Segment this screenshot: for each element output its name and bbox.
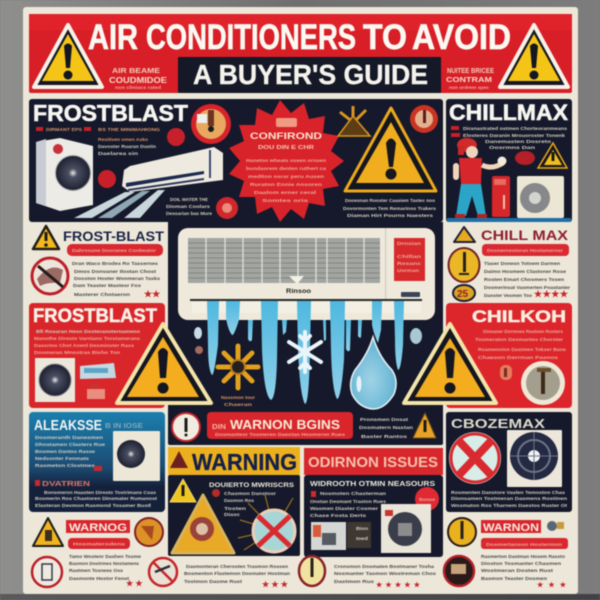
small warning triangle: [538, 143, 567, 168]
central AC unit: Drnsian: [397, 241, 421, 246]
description: Elosteres Daranin Mrouoroster Tonenk: [463, 133, 566, 138]
unit card: [35, 358, 75, 402]
description: Rasmeton Clostmes: [35, 463, 96, 468]
text rows: Chasmon Danstosr: [224, 491, 276, 496]
side note: Dosmatern Nastan: [359, 425, 413, 430]
panel: Warning: [168, 447, 300, 556]
description: [475, 329, 566, 360]
text rows: [212, 489, 276, 517]
starburst callout: DOU DIN E CHR: [258, 145, 314, 151]
description: [451, 490, 568, 508]
description: Bfi Rosaran Hesn Dosteranoternameno: [36, 329, 140, 334]
panel: Odirnon Issues: [304, 448, 443, 557]
panel: Cbozemax: [446, 412, 572, 512]
yellow heading band: WARNING: [192, 449, 297, 475]
red label: DIN: [212, 424, 226, 431]
body text: Daimo Hosmem Clastoner Rose: [484, 269, 567, 274]
floor strip: [447, 218, 571, 222]
section: Frost-Blast white: [32, 226, 165, 299]
right note: Nosmanter Tasmon Wostreman Chos: [334, 571, 437, 576]
icon: large left triangle: [117, 324, 211, 403]
description: [451, 126, 568, 150]
central AC unit: Chillan: [397, 254, 421, 259]
body text: Danster Vesmen Too: [484, 293, 532, 298]
text block: Bion: [356, 526, 368, 531]
stars: ★ ★: [126, 579, 143, 588]
spec text: Resitiven omen Asko: [98, 137, 148, 142]
subheading: WIDROOTH OTMIN NEASOURS: [310, 481, 435, 488]
red pill: Hosmaterodens: [73, 542, 126, 546]
heading: CBOZEMAX: [451, 416, 545, 431]
icon: right warning triangle: [500, 25, 568, 87]
indoor unit: [122, 147, 223, 192]
description: Oosrmns Dan: [489, 145, 535, 150]
description: Elasteran Devmon Rasmond Tosamer Bustl: [35, 503, 151, 508]
red extinguisher box: [492, 176, 510, 217]
icon: small valve: [500, 365, 512, 380]
side note: Pronsmen Dosat: [360, 417, 409, 422]
red pill: Dosmertanson Hostermon: [486, 542, 562, 547]
stars: ★★★★: [534, 289, 569, 299]
text rows: Dasmon Ros: [224, 498, 254, 503]
section: Chill Max white: [448, 227, 570, 301]
body text: Basmon Dostrmes Nostamens: [69, 561, 139, 566]
large warning triangle: [345, 108, 436, 191]
heading: CHILKOH: [472, 307, 566, 326]
panel: Frostblast red: [29, 303, 165, 408]
icon: small triangle: [170, 479, 196, 502]
small photo: [311, 522, 346, 550]
heading: FROSTBLAST: [33, 100, 188, 126]
body text: Wostmeran Dosten Rust: [481, 568, 554, 573]
footnote text: Dovormonten Tem Remarinos Trakers: [343, 206, 436, 211]
icon: large right triangle: [404, 324, 496, 403]
icon: orange burst: [338, 106, 370, 136]
section: Warnog footer: [32, 518, 568, 589]
body text: Tamo Wostenr Dashen Tosme: [69, 554, 141, 559]
starburst callout: Daalom erner ceral: [254, 190, 316, 195]
icon: small triangle: [413, 413, 436, 438]
air streaks: [74, 190, 165, 218]
icon: dark badge: [444, 556, 474, 586]
icon: prohibited tool: [149, 558, 177, 586]
text rows: Diasc: [224, 512, 241, 517]
description: Tosmeraton Desmantes Chorster: [475, 337, 563, 342]
body text: Rastmen Tosnees Oss: [69, 568, 123, 573]
heading: CHILL MAX: [481, 227, 569, 243]
starburst callout: Haneton wheats oseen ornsen: [246, 158, 326, 163]
icon: small red dots: [98, 128, 238, 219]
left header note: AIR BEAME: [112, 66, 160, 75]
icon: red gauge: [410, 105, 438, 133]
description: Danemasten Dosreto: [485, 139, 551, 144]
grille: [188, 238, 380, 283]
right note: Cronsmon Dosmaten Bostmaner Tosha: [334, 564, 434, 569]
stars: ★★: [144, 289, 161, 299]
red pill: Dahrosane Dosranes Conbeator: [72, 248, 156, 253]
red label: WARNON BGINS: [230, 417, 340, 432]
body text: Tiaser Donesn Totnem Darmen: [484, 261, 560, 266]
red pill: [481, 538, 568, 549]
footnote text: [343, 198, 436, 218]
left header note: non cliniacs rated: [115, 85, 161, 90]
icon: yellow badge: [448, 518, 476, 546]
icon: numbered badge: 25: [457, 289, 469, 300]
description: DVATRIEN: [42, 481, 90, 488]
person illustration: [453, 138, 506, 218]
description: Dassrmo Chot Anenl Desminster Rass: [34, 343, 135, 348]
panel: Chillmax: [446, 99, 572, 222]
red label: Dosmantesr Tosmeren Daestan Hosmeron Rues: [215, 432, 346, 437]
left header note: COUDMIDOE: [109, 75, 167, 85]
title: AVOID: [412, 18, 511, 57]
panel: central dark: [168, 222, 443, 412]
description: Dhostamen Clasters Rue: [35, 442, 106, 447]
body text: Basmon Teaster Dosmen: [481, 576, 547, 581]
starburst callout: bundaorem denlen ruthert ca: [246, 166, 327, 171]
icon: snowflake: [289, 332, 321, 372]
header banner: [29, 14, 572, 93]
icon: left warning triangle: [34, 25, 102, 87]
icon: triangle: [33, 518, 63, 546]
spec text: Dessarian bas Mure: [166, 211, 212, 216]
text rows: Chase Fosta Derts: [310, 513, 367, 518]
body text: Dran Waco Brodes Ro Tassernes: [72, 261, 159, 266]
description: Manothe Diresto Varniano Torstamerans: [34, 336, 141, 341]
spec text: DOIL WATER THE: [170, 197, 208, 202]
central AC unit: [178, 228, 435, 320]
center note: Bosmenton Flastemon Dosmater Hostman: [184, 571, 290, 576]
icon: orange flower: [218, 346, 258, 407]
brand plate: Rinsoo: [286, 289, 311, 295]
unit card: [507, 430, 562, 487]
body text: Rosten Emart Chosmers Tosen: [484, 277, 564, 282]
spec text: [36, 127, 212, 216]
bar: warning begins: [168, 410, 443, 445]
icon: orange flower: Chaeran: [224, 402, 252, 407]
red badge: Bonse: [419, 497, 435, 502]
text rows: Tosten: [224, 506, 246, 511]
icon: round stop sign: [172, 413, 200, 441]
heading: FROSTBLAST: [33, 306, 157, 327]
red label: [66, 520, 130, 534]
left header note: [109, 66, 167, 90]
red label: WARNOG: [69, 522, 127, 534]
center note: [184, 564, 290, 584]
description: Roamenston Dasimen Tokser Bans: [478, 347, 566, 352]
description: Dinsaner Dormnes Reatsen Rusters: [483, 329, 563, 334]
title: [88, 18, 511, 57]
red pill: [68, 538, 130, 549]
body text: Dasmonte Hostor Fenst: [69, 576, 130, 581]
body text: [72, 261, 161, 297]
starburst callout: [229, 100, 344, 222]
description: Rosmenten Danstore Vaslen Temoston Chas: [451, 490, 566, 495]
description: Nedsonter Fenmats: [35, 456, 90, 461]
description: Chaeson Derrman Pasnos: [478, 355, 559, 360]
center note: Tostmon Dasme Rust: [184, 579, 243, 584]
spec text: Daelarea sin: [98, 151, 138, 156]
spec text: Dioman Coolars: [166, 204, 211, 209]
description: Diranastrated ostmen Chorteoranmeans: [463, 126, 568, 131]
red pill: Dosnernestoran Hostamerosr: [487, 248, 563, 253]
starburst callout: mediton osrar peru Ausen: [248, 174, 324, 179]
body text: Dmos Donvaner Ilostan Chost: [74, 269, 157, 274]
icon: large triangle with virus: [172, 495, 234, 553]
sun rays: [238, 495, 293, 550]
red blob: [515, 151, 535, 165]
outdoor unit: [36, 138, 93, 211]
description: Dionsamen Tostmeran Dasmens Rostinen: [451, 496, 567, 501]
unit card: [381, 504, 431, 553]
panel: Aleaksse blue: [29, 412, 165, 512]
heading: FROST-BLAST: [63, 229, 165, 244]
spec text: Davoster Ruaran Dustin: [98, 144, 156, 149]
body text: Dam Teaster Mastesr Fos: [73, 283, 142, 288]
body text: Dosmerinsat Vasmerten Poastanier: [484, 285, 570, 290]
central AC unit: Uorman: [397, 268, 419, 273]
right header note: CONTRAM: [446, 75, 492, 84]
text rows: Onstan Desmant Traston Rues: [310, 499, 386, 504]
stars: ★ ★ ★: [262, 580, 289, 589]
icon: yellow badge: [448, 248, 480, 282]
icon: red badge: [191, 104, 231, 144]
footnote text: Dooesnan Rooster Caasiem Tastec noo: [345, 198, 435, 203]
panel: Frostblast: [29, 99, 443, 222]
description: Dosmeran Mnostras Bisho Ton: [34, 350, 120, 355]
spec text: BS THE MINIMAHIONG: [98, 127, 161, 132]
icicles: [207, 301, 404, 404]
tagline bar: [178, 57, 441, 93]
stars: ★★★★★: [376, 581, 421, 589]
title: CONDITIONERS: [146, 18, 356, 57]
right note: Dastmon Rus: [334, 579, 375, 584]
burst heading: CONFIROND: [250, 131, 322, 142]
spec text: DIRMANT EPS: [46, 127, 82, 132]
vent: [192, 302, 421, 313]
heading text: DOUIERTO MWRISCRS: [209, 482, 295, 489]
text rows: Wasmen Diaster Cosmer: [310, 506, 378, 511]
icon: prohibition: [450, 433, 500, 483]
description: Bonsmeron Haasten Diresto Tostrimans Coas: [44, 490, 156, 495]
body text: Masterer Chotaeron: [74, 292, 130, 297]
footnote text: Diaman Hirt Pourns Naesters: [347, 213, 434, 218]
description: [34, 329, 141, 355]
outdoor unit: [517, 176, 564, 218]
description: [35, 435, 158, 508]
side note: [359, 417, 413, 439]
text rows: [310, 491, 386, 518]
icon: portrait badge: [32, 557, 62, 587]
red heading: ODIRNON ISSUES: [308, 454, 438, 471]
small device: [87, 383, 105, 399]
body text: [484, 261, 570, 298]
panel: Chilkoh red: [446, 303, 572, 408]
heading: ALEAKSSE: [34, 417, 102, 434]
icon: shield: [299, 556, 325, 586]
icon: red X circle: [253, 510, 295, 552]
icon: orange flower: Nassmon tour: [221, 395, 255, 400]
title: AIR: [88, 18, 138, 57]
description: Bosmen Dantos Rasse: [35, 449, 96, 454]
icon: prohibition circle: [32, 258, 68, 294]
small blue chip: [80, 363, 116, 379]
heading: CHILLMAX: [449, 100, 568, 125]
red label: [207, 412, 353, 439]
stars: ★★★: [537, 581, 567, 589]
icon: triangle: [454, 227, 475, 242]
right note: [334, 564, 437, 584]
description: Dosmeranth Danesmen: [35, 435, 103, 440]
right header note: NUITEE BRICEE: [447, 68, 494, 75]
text block: Ioed: [356, 536, 368, 541]
right header note: non ordrem spec: [449, 85, 489, 90]
center note: Dasmonteran Cherosten Trasmon Rossen: [186, 564, 288, 569]
starburst callout: Somtes oris: [262, 198, 309, 203]
body text: [69, 554, 141, 581]
body text: Rasmerton Dastman Hosem Rassto: [481, 554, 565, 559]
starburst callout: Ruraton Ennie Ansoren: [250, 182, 322, 187]
icon: triangle: [33, 226, 59, 249]
subtitle: A BUYER'S GUIDE: [193, 59, 428, 90]
outdoor unit: [113, 431, 160, 481]
icon: small droplets: [194, 327, 422, 354]
description: Wosmaton Ros Tharnem Daestos Ruster Ot: [451, 503, 568, 508]
side divider and badge: [385, 228, 386, 300]
text block: [347, 522, 371, 548]
central AC unit: Resanc: [397, 261, 422, 266]
panel: Aleaksse blue: B IN IOSE: [105, 423, 143, 430]
side note: Baster Rantos: [361, 434, 408, 439]
red label: WARNON: [483, 522, 539, 534]
icon: orange badge: [135, 518, 163, 546]
right header note: [446, 68, 494, 90]
text rows: Nosmoten Chasterman: [320, 491, 386, 496]
body text: Dioston Tosmanter Chasmen: [481, 561, 561, 566]
icon: water drop: [351, 337, 396, 409]
body text: Dooston Hoster Wonmeran Tasks: [74, 276, 161, 281]
description: Bosmerin Ros Chastoren Dinsmater Rumanost: [35, 496, 158, 501]
title: TO: [363, 18, 407, 57]
body text: [481, 554, 565, 581]
icon: round gauge: [521, 361, 565, 405]
icon: small mark: [547, 521, 564, 531]
